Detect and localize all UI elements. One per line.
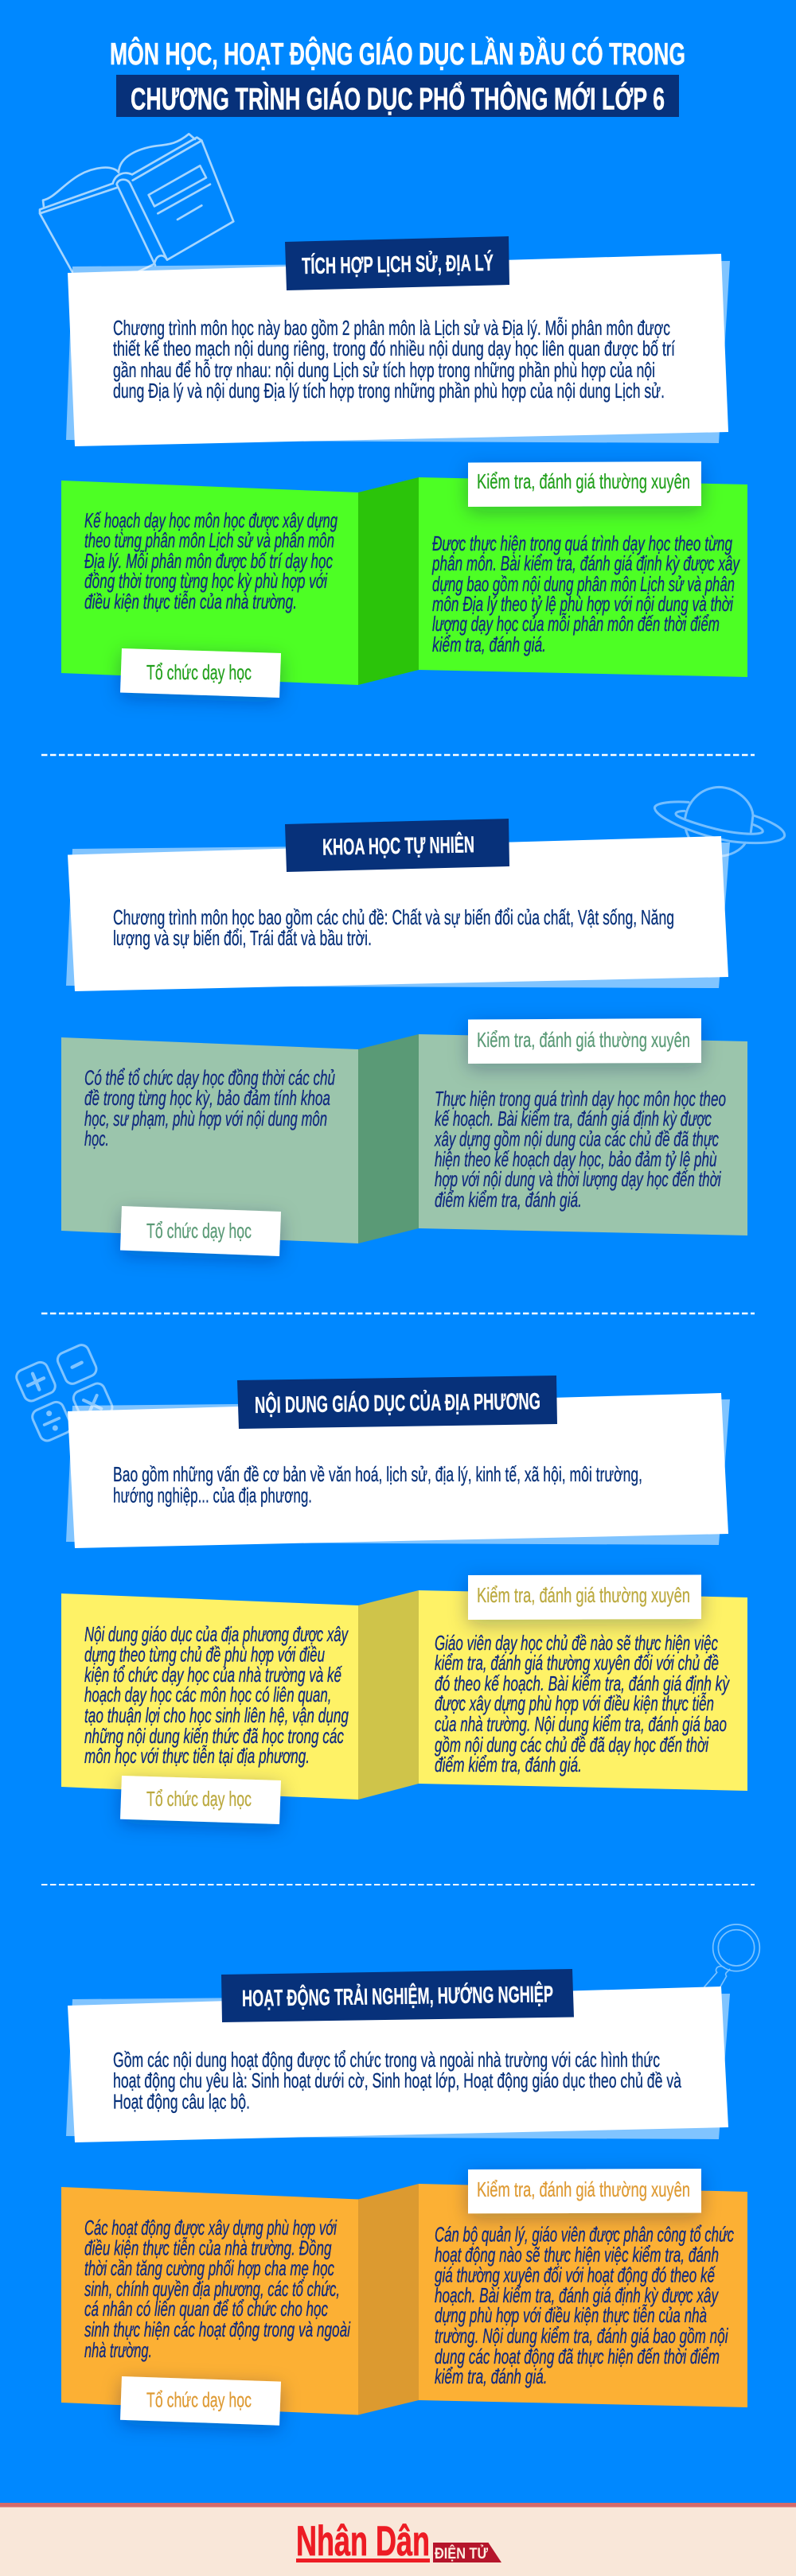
label: tổ chức sage: Tổ chức dạy học bbox=[146, 1219, 252, 1243]
heading: tích hợp lịch sử, địa lý bbox=[285, 236, 509, 290]
panel: khoa học tự nhiên intro bbox=[66, 819, 730, 991]
label: tổ chức green bbox=[120, 648, 281, 698]
label: kiểm tra green: Kiểm tra, đánh giá thường xuyên bbox=[477, 469, 690, 493]
text block: tổ chức dạy học green: theo từng phân môn Lịch sử và phân môn bbox=[84, 528, 334, 552]
text block: tổ chức orange: cá nhân có liên quan để tổ chức cho học bbox=[84, 2297, 328, 2321]
text block: tổ chức yellow: hoạch dạy học các môn học có liên quan, bbox=[84, 1683, 331, 1706]
text block: tổ chức orange: Các hoạt động được xây dựng phù hợp với bbox=[84, 2216, 338, 2239]
heading: nội dung giáo dục của địa phương: NỘI DUNG GIÁO DỤC CỦA ĐỊA PHƯƠNG bbox=[255, 1387, 540, 1418]
text block: tổ chức dạy học green: Kế hoạch dạy học môn học được xây dựng bbox=[84, 508, 338, 532]
heading: nội dung giáo dục của địa phương bbox=[237, 1376, 557, 1429]
text block: tổ chức yellow: dựng theo từng chủ đề phù hợp với điều bbox=[84, 1642, 325, 1666]
text block: tổ chức sage: học. bbox=[84, 1127, 109, 1150]
text block: kiểm tra orange bbox=[435, 2223, 734, 2388]
logo: nhân dân điện tử: Nhân Dân bbox=[296, 2518, 430, 2565]
icon: magnifier bbox=[704, 1924, 759, 1986]
label: kiểm tra yellow bbox=[468, 1575, 701, 1620]
text block: kiểm tra sage bbox=[434, 1087, 726, 1212]
heading: hoạt động trải nghiệm, hướng nghiệp: HOẠT ĐỘNG TRẢI NGHIỆM, HƯỚNG NGHIỆP bbox=[242, 1980, 553, 2012]
text block: tổ chức sage: Có thể tổ chức dạy học đồng thời các chủ bbox=[84, 1066, 335, 1090]
text block: tổ chức sage bbox=[84, 1066, 335, 1150]
panel: sage fold bbox=[61, 1018, 747, 1256]
label: kiểm tra orange bbox=[468, 2169, 701, 2213]
text block: tổ chức sage: đề trong từng học kỳ, bảo đảm tính khoa bbox=[84, 1086, 330, 1110]
label: tổ chức yellow bbox=[120, 1776, 281, 1824]
panel: nội dung giáo dục của địa phương intro bbox=[66, 1376, 730, 1548]
text block: tổ chức orange: điều kiện thực tiễn của nhà trường. Đồng bbox=[84, 2236, 332, 2259]
text block: tổ chức sage: học, sư phạm, phù hợp với nội dung môn bbox=[84, 1107, 327, 1130]
text block: tổ chức orange: thời cần tăng cường phối hợp cha mẹ học bbox=[84, 2256, 334, 2280]
text block: kiểm tra green: kiểm tra, đánh giá. bbox=[432, 632, 546, 656]
label: tổ chức orange: Tổ chức dạy học bbox=[146, 2388, 252, 2412]
text block: tổ chức yellow: Nội dung giáo dục của địa phương được xây bbox=[84, 1622, 349, 1646]
divider 3 bbox=[41, 1884, 755, 1885]
text block: tổ chức yellow: môn học với thực tiễn tại địa phương. bbox=[84, 1744, 310, 1768]
heading: tích hợp lịch sử, địa lý: TÍCH HỢP LỊCH SỬ, ĐỊA LÝ bbox=[302, 249, 494, 279]
panel: orange fold bbox=[61, 2169, 747, 2426]
text block: tổ chức orange: sinh, chính quyền địa phương, các tổ chức, bbox=[84, 2277, 340, 2301]
heading: khoa học tự nhiên bbox=[285, 819, 509, 872]
footer bbox=[0, 2503, 796, 2576]
text block: intro: Hoạt động câu lạc bộ. bbox=[113, 2089, 250, 2113]
label: kiểm tra sage: Kiểm tra, đánh giá thường xuyên bbox=[477, 1028, 690, 1052]
divider 1 bbox=[41, 754, 755, 756]
logo: nhân dân điện tử: ĐIỆN TỬ bbox=[435, 2545, 488, 2562]
label: tổ chức sage bbox=[120, 1206, 281, 1256]
icon: open book bbox=[40, 134, 233, 272]
text block: kiểm tra orange: kiểm tra, đánh giá. bbox=[435, 2364, 548, 2388]
heading: khoa học tự nhiên: KHOA HỌC TỰ NHIÊN bbox=[322, 831, 474, 861]
label: tổ chức orange bbox=[120, 2376, 281, 2426]
text block: tổ chức orange: nhà trường. bbox=[84, 2338, 152, 2362]
label: kiểm tra sage bbox=[468, 1018, 701, 1064]
panel: tích hợp lịch sử, địa lý intro bbox=[66, 236, 730, 446]
text block: kiểm tra yellow: điểm kiểm tra, đánh giá. bbox=[435, 1753, 582, 1776]
text block: tổ chức orange: sinh thực hiện các hoạt động trong và ngoài bbox=[84, 2317, 351, 2341]
text block: tổ chức dạy học green: điều kiện thực tiễn của nhà trường. bbox=[84, 590, 297, 613]
text block: kiểm tra green bbox=[431, 531, 740, 656]
text block: tổ chức yellow: những nội dung kiến thức đã học trong các bbox=[84, 1724, 344, 1748]
label: kiểm tra yellow: Kiểm tra, đánh giá thường xuyên bbox=[477, 1583, 690, 1607]
label: tổ chức yellow: Tổ chức dạy học bbox=[146, 1787, 252, 1811]
panel: hoạt động trải nghiệm, hướng nghiệp intro bbox=[66, 1969, 730, 2142]
text block: intro bbox=[113, 316, 676, 403]
text block: tổ chức dạy học green bbox=[84, 508, 338, 613]
text block: tổ chức yellow: tạo thuận lợi cho học sinh liên hệ, vận dụng bbox=[84, 1703, 349, 1727]
icon: planet bbox=[654, 787, 785, 856]
text block: tổ chức yellow: kiện tổ chức dạy học của nhà trường và kế bbox=[84, 1663, 342, 1687]
text block: intro: lượng và sự biến đổi, Trái đất và bầu trời. bbox=[113, 926, 372, 950]
text block: kiểm tra sage: điểm kiểm tra, đánh giá. bbox=[435, 1188, 582, 1212]
icon: calculator keys bbox=[14, 1343, 115, 1443]
text block: tổ chức dạy học green: đồng thời trong từng học kỳ phù hợp với bbox=[84, 569, 328, 593]
text block: tổ chức yellow bbox=[84, 1622, 349, 1768]
text block: tổ chức dạy học green: Địa lý. Mỗi phân môn được bố trí dạy học bbox=[84, 549, 333, 573]
text block: intro bbox=[113, 905, 674, 950]
label: kiểm tra orange: Kiểm tra, đánh giá thường xuyên bbox=[477, 2177, 690, 2201]
panel: green fold bbox=[61, 461, 747, 698]
label: kiểm tra green bbox=[468, 461, 701, 507]
heading: hoạt động trải nghiệm, hướng nghiệp bbox=[221, 1969, 574, 2022]
text block: tổ chức orange bbox=[84, 2216, 351, 2362]
text block: intro bbox=[113, 2048, 681, 2113]
text block: intro: hướng nghiệp... của địa phương. bbox=[113, 1483, 312, 1507]
title bbox=[110, 36, 685, 117]
divider 2 bbox=[41, 1313, 755, 1314]
panel: yellow fold bbox=[61, 1575, 747, 1824]
text block: intro bbox=[113, 1462, 642, 1507]
label: tổ chức green: Tổ chức dạy học bbox=[146, 660, 252, 684]
text block: kiểm tra yellow bbox=[435, 1631, 730, 1776]
